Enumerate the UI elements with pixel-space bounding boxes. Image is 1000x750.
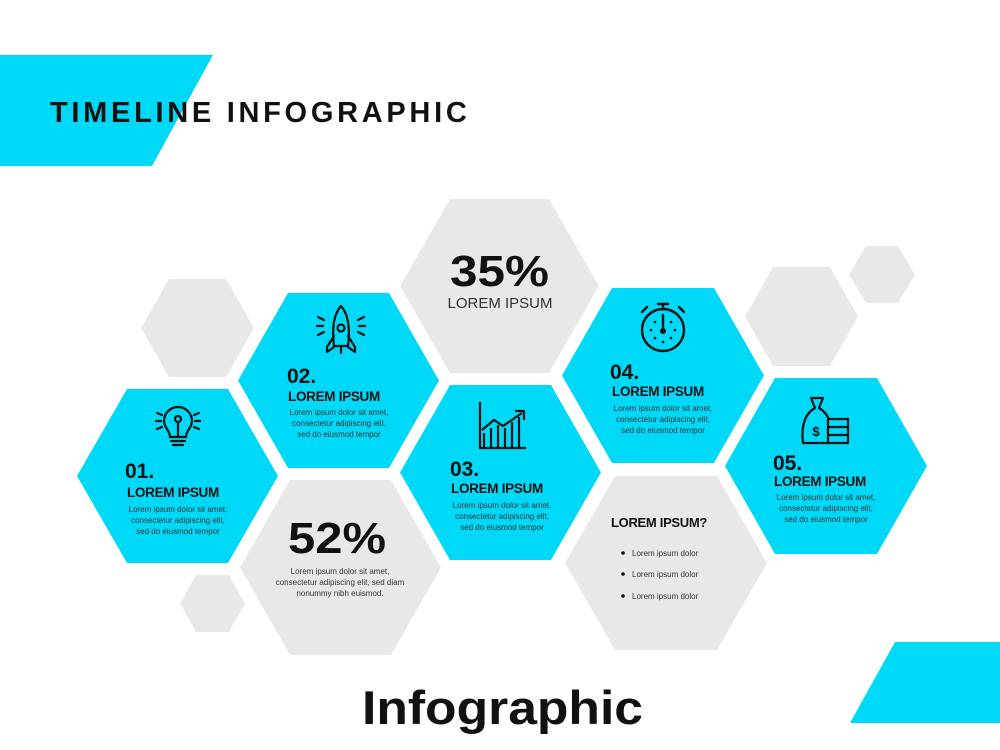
title banner shape bbox=[0, 55, 213, 166]
panel: step 02: sed do eiusmod tempor bbox=[297, 430, 381, 439]
panel: step 01: consectetur adipiscing elit, bbox=[131, 516, 225, 525]
panel: 52% stat: consectetur adipiscing elit, sed diam bbox=[276, 578, 405, 587]
panel: step 02: consectetur adipiscing elit, bbox=[292, 419, 386, 428]
footer title: Infographic bbox=[362, 681, 643, 734]
decorative corner shape bottom right bbox=[850, 642, 1000, 723]
icon: rocket bbox=[317, 306, 365, 353]
panel: step 05: LOREM IPSUM bbox=[774, 474, 866, 489]
panel: step 02 bbox=[238, 293, 439, 468]
decorative hexagon: small bottom left bbox=[180, 575, 245, 632]
panel: step 04: consectetur adipiscing elit, bbox=[616, 415, 710, 424]
panel: step 01: Lorem ipsum dolor sit amet, bbox=[129, 505, 227, 514]
panel: step 01: sed do eiusmod tempor bbox=[136, 527, 220, 536]
panel: step 03 bbox=[400, 385, 601, 560]
panel: step 03: Lorem ipsum dolor sit amet, bbox=[453, 501, 551, 510]
panel: step 04: Lorem ipsum dolor sit amet, bbox=[614, 404, 712, 413]
panel: step 02: Lorem ipsum dolor sit amet, bbox=[290, 408, 388, 417]
panel: lorem ipsum list: Lorem ipsum dolor bbox=[632, 592, 699, 601]
panel: step 01: LOREM IPSUM bbox=[127, 485, 219, 500]
panel: step 05: 05. bbox=[773, 452, 802, 475]
panel: 52% stat: Lorem ipsum dolor sit amet, bbox=[291, 567, 389, 576]
panel: lorem ipsum list: LOREM IPSUM? bbox=[611, 515, 707, 530]
panel: step 04: 04. bbox=[610, 361, 639, 384]
decorative hexagon: gray left bbox=[141, 279, 254, 377]
panel: step 01 bbox=[77, 389, 278, 563]
panel: 35% stat: 35% bbox=[450, 247, 549, 296]
panel: step 03: 03. bbox=[450, 458, 479, 481]
panel: 52% stat: 52% bbox=[288, 514, 386, 563]
panel: 35% stat: LOREM IPSUM bbox=[447, 295, 553, 312]
panel: step 02: LOREM IPSUM bbox=[288, 389, 380, 404]
panel: step 04: LOREM IPSUM bbox=[612, 384, 704, 399]
panel: step 01: 01. bbox=[125, 460, 154, 483]
panel: step 02: 02. bbox=[287, 365, 316, 388]
icon: growth chart bbox=[480, 402, 526, 448]
panel: step 05: $ bbox=[812, 424, 820, 439]
panel: lorem ipsum list: Lorem ipsum dolor bbox=[632, 570, 699, 579]
icon: money bag and coins bbox=[802, 398, 848, 443]
panel: step 05 bbox=[725, 378, 927, 554]
panel: lorem ipsum list: Lorem ipsum dolor bbox=[632, 549, 699, 558]
panel: step 03: consectetur adipiscing elit, bbox=[455, 512, 549, 521]
panel: step 05: consectetur adipiscing elit, bbox=[779, 504, 873, 513]
panel: lorem ipsum list bbox=[565, 476, 767, 650]
panel: step 03: sed do eiusmod tempor bbox=[460, 523, 544, 532]
panel: step 04: sed do eiusmod tempor bbox=[621, 426, 705, 435]
decorative hexagon: small right bbox=[849, 246, 915, 303]
panel: 52% stat: nonummy nibh euismod. bbox=[296, 589, 384, 598]
panel: step 05: Lorem ipsum dolor sit amet, bbox=[777, 493, 875, 502]
panel: step 04 bbox=[562, 288, 764, 463]
icon: stopwatch bbox=[642, 304, 684, 351]
panel: step 05: sed do eiusmod tempor bbox=[784, 515, 868, 524]
panel: 35% stat bbox=[400, 199, 599, 373]
icon: light bulb bbox=[156, 407, 200, 445]
decorative hexagon: gray right bbox=[745, 267, 858, 366]
title: TIMELINE INFOGRAPHIC bbox=[50, 97, 470, 129]
panel: 52% stat bbox=[240, 480, 441, 655]
panel: step 03: LOREM IPSUM bbox=[451, 481, 543, 496]
